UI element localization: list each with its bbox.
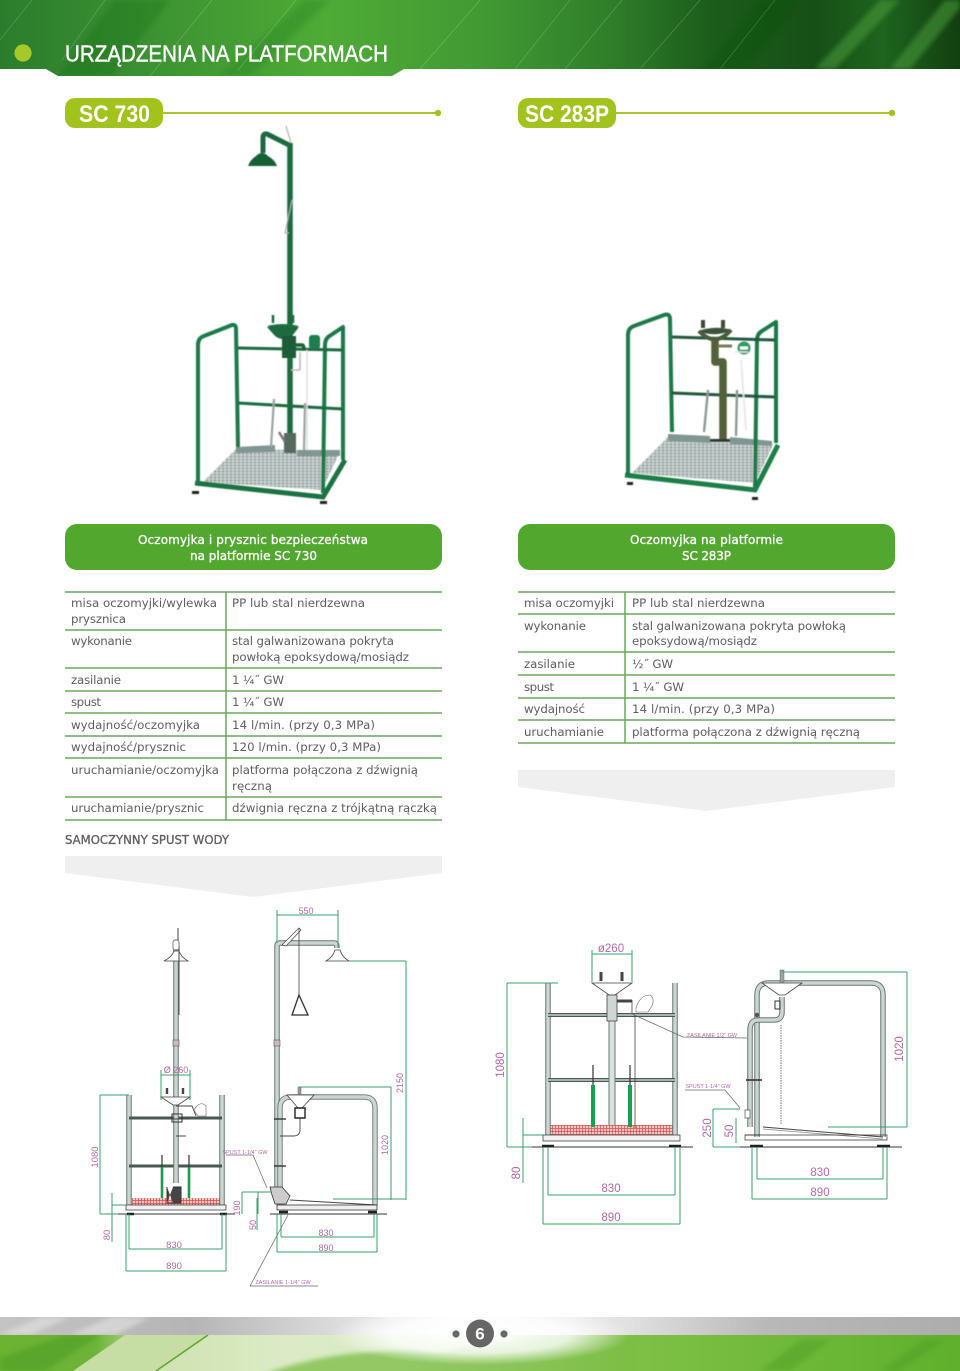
dimension: 830: 830: [601, 1183, 621, 1195]
dimension: 190: 190: [232, 1200, 242, 1216]
row: misa: PP lub stal nierdzewna: [232, 596, 365, 610]
row: zasilanie: [524, 657, 673, 671]
dimension: 1020: 1020: [894, 1036, 906, 1062]
dimension: 50: 50: [724, 1125, 736, 1137]
dimension: 550: 550: [298, 906, 314, 916]
row: zasilanie: 1 ¼˝ GW: [232, 673, 284, 687]
row: zasilanie: zasilanie: [71, 673, 121, 687]
dimension: ø 260: Ø 260: [164, 1065, 188, 1075]
section header: SC 283P: SC 283P: [525, 101, 609, 128]
row: spust: spust: [524, 680, 554, 694]
row: wydajność: 14 l/min. (przy 0,3 MPa): [632, 702, 775, 716]
dimension: 830: 830: [166, 1240, 182, 1251]
row: wydajność/prysznic: [71, 740, 381, 754]
row: wydajność: wydajność: [524, 702, 585, 716]
row: uruchamianie/prysznic: [71, 801, 437, 815]
specification table: SC 730: [65, 592, 442, 820]
description banner: SC 283P: Oczomyjka na platformie: [630, 533, 783, 547]
callout: supply: [630, 1013, 747, 1039]
row: misa oczomyjki: [524, 596, 765, 610]
section header: SC 730: [65, 98, 441, 128]
dimension: ø260: ø260: [598, 943, 624, 955]
row: spust: 1 ¼˝ GW: [232, 695, 284, 709]
dimension: 2150: 2150: [395, 1073, 405, 1093]
header bullet: [14, 44, 32, 62]
row: wykonanie: epoksydową/mosiądz: [632, 634, 757, 648]
technical drawing: SC 730 front view: [90, 928, 235, 1272]
row: uruchamianie/oczomyjka: ręczną: [232, 779, 272, 793]
row: misa oczomyjki: misa oczomyjki: [524, 596, 614, 610]
callout: supply: ZASILANIE 1/2" GW: [687, 1033, 738, 1039]
row: wydajność/prysznic: 120 l/min. (przy 0,3 MPa): [232, 740, 381, 754]
callout: drain: SPUST 1-1/4" GW: [685, 1084, 731, 1090]
page title: URZĄDZENIA NA PLATFORMACH: [65, 40, 388, 66]
row: zasilanie: ½˝ GW: [632, 657, 673, 671]
row: misa: prysznica: [71, 612, 126, 626]
row: uruchamianie/oczomyjka: [71, 763, 418, 793]
row: uruchamianie/prysznic: uruchamianie/prysznic: [71, 801, 204, 815]
description banner: SC 730: Oczomyjka i prysznic bezpieczeństwa: [138, 533, 368, 547]
row: wydajność/oczomyjka: [71, 718, 375, 732]
row: wydajność/oczomyjka: wydajność/oczomyjka: [71, 718, 200, 732]
row: spust: [524, 680, 684, 694]
description banner: SC 730: [65, 524, 442, 570]
section header: SC 730: SC 730: [79, 101, 150, 128]
dimension: 80: 80: [102, 1230, 113, 1240]
dimension: 890: 890: [166, 1261, 182, 1272]
page number: [452, 1320, 508, 1348]
callout: drain: SPUST 1-1/4" GW: [222, 1150, 268, 1156]
note: automatic water drain: SAMOCZYNNY SPUST WODY: [65, 833, 230, 847]
arrow: SC 283P to drawing: [518, 770, 895, 811]
section header: SC 283P: [518, 98, 895, 128]
callout: supply: ZASILANIE 1-1/4" GW: [255, 1280, 311, 1286]
row: spust: spust: [71, 695, 101, 709]
row: wykonanie: wykonanie: [524, 619, 586, 633]
dimension: 890: 890: [810, 1187, 830, 1199]
row: wykonanie: stal galwanizowana pokryta powłoką: [632, 619, 846, 633]
dimension: 50: 50: [248, 1220, 258, 1230]
row: misa: misa oczomyjki/wylewka: [71, 596, 217, 610]
dimension: 830: 830: [318, 1228, 334, 1238]
row: wykonanie: wykonanie: [71, 634, 132, 648]
callout: drain: [685, 1084, 740, 1108]
row: spust: [71, 695, 284, 709]
description banner: SC 283P: SC 283P: [682, 549, 731, 563]
row: spust: 1 ¼˝ GW: [632, 680, 684, 694]
row: wykonanie: [524, 619, 846, 648]
description banner: SC 283P: [518, 524, 895, 570]
row: wydajność: [524, 702, 775, 716]
page number: 6: [475, 1324, 485, 1344]
dimension: 830: 830: [810, 1167, 830, 1179]
row: wykonanie: powłoką epoksydową/mosiądz: [232, 650, 409, 664]
row: uruchamianie/prysznic: dźwignia ręczna z trójkątną rączką: [232, 801, 437, 815]
row: wykonanie: stal galwanizowana pokryta: [232, 634, 394, 648]
dimension: 1080: 1080: [495, 1052, 507, 1078]
product photo: SC 283P eyewash on platform: [625, 314, 778, 500]
row: zasilanie: [71, 673, 284, 687]
row: zasilanie: zasilanie: [524, 657, 575, 671]
row: wydajność/prysznic: wydajność/prysznic: [71, 740, 186, 754]
technical drawing: SC 283P front view: [495, 943, 693, 1224]
header banner: [0, 0, 960, 76]
row: uruchamianie/oczomyjka: platforma połączona z dźwignią: [232, 763, 418, 777]
callout: drain: [222, 1150, 268, 1188]
dimension: 890: 890: [601, 1212, 621, 1224]
description banner: SC 730: na platformie SC 730: [190, 549, 317, 563]
row: uruchamianie/oczomyjka: uruchamianie/oczomyjka: [71, 763, 219, 777]
row: uruchamianie: [524, 725, 860, 739]
row: misa: [71, 596, 365, 626]
row: uruchamianie: uruchamianie: [524, 725, 604, 739]
technical drawing: SC 283P side view: [630, 970, 907, 1199]
row: wydajność/oczomyjka: 14 l/min. (przy 0,3 MPa): [232, 718, 375, 732]
dimension: 250: 250: [702, 1118, 714, 1138]
product photo: SC 730 shower and eyewash on platform: [192, 126, 345, 504]
row: misa oczomyjki: PP lub stal nierdzewna: [632, 596, 765, 610]
arrow: SC 730 to drawing: [65, 856, 442, 897]
row: uruchamianie: platforma połączona z dźwignią ręczną: [632, 725, 860, 739]
dimension: 1020: 1020: [380, 1135, 390, 1155]
dimension: 1080: 1080: [90, 1146, 101, 1168]
row: wykonanie: [71, 634, 409, 664]
technical drawing: SC 730 side view: [222, 906, 406, 1286]
callout: supply: [250, 1215, 318, 1286]
dimension: 80: 80: [511, 1167, 523, 1179]
specification table: SC 283P: [518, 592, 895, 743]
footer band: [0, 1317, 960, 1371]
dimension: 890: 890: [318, 1243, 334, 1253]
